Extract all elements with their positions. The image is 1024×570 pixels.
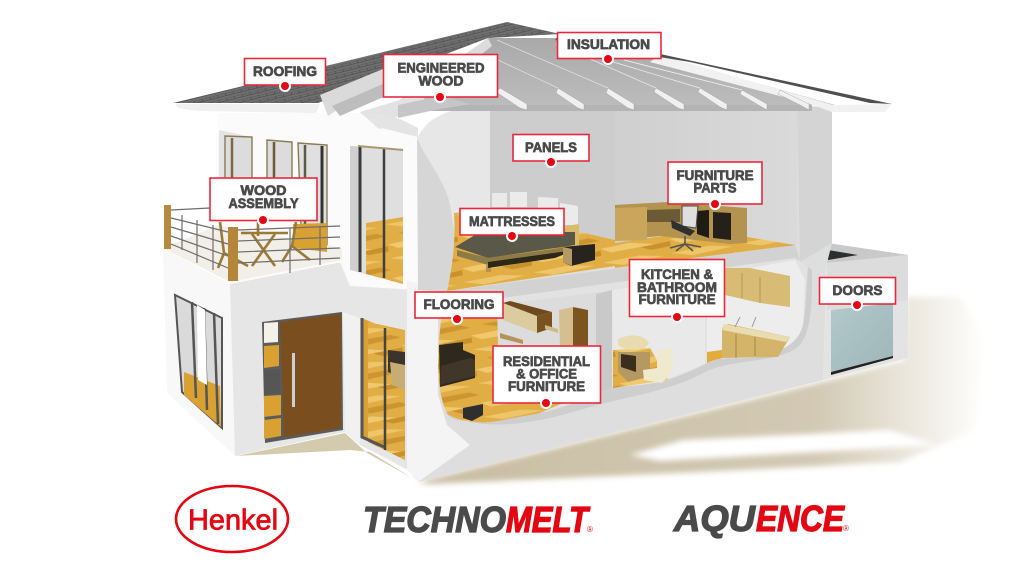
label: furniture parts <box>668 162 762 210</box>
label: residential and office furniture: RESIDENTIAL <box>503 354 590 369</box>
label: furniture parts: FURNITURE <box>676 168 754 183</box>
rafters <box>496 40 809 110</box>
label: kitchen and bathroom furniture: FURNITURE <box>638 292 716 307</box>
house <box>163 22 908 482</box>
left eave rafters <box>320 58 470 137</box>
label: kitchen and bathroom furniture: BATHROOM <box>637 280 717 295</box>
lower left wing wall <box>163 248 235 456</box>
icon: entrance door <box>262 312 343 443</box>
office furniture <box>615 202 747 251</box>
label: wood assembly <box>210 178 317 226</box>
balcony <box>163 205 342 282</box>
logo: Technomelt <box>363 499 593 540</box>
wood table and chairs <box>218 222 310 268</box>
label: insulation: INSULATION <box>567 37 650 52</box>
ground left windows <box>175 295 222 428</box>
label: panels: PANELS <box>525 140 577 155</box>
label: furniture parts: PARTS <box>694 180 736 196</box>
label: kitchen and bathroom furniture: KITCHEN & <box>641 267 713 282</box>
label: wood assembly: ASSEMBLY <box>228 196 298 211</box>
label: flooring <box>415 292 503 325</box>
logo: Henkel: Henkel <box>188 504 278 536</box>
logo: Aquence <box>673 498 849 539</box>
logo: Technomelt: TECHNO <box>363 499 506 540</box>
upper floor room walls <box>417 105 832 292</box>
label: mattresses <box>460 208 564 242</box>
bed <box>455 224 579 272</box>
office chair <box>670 206 701 251</box>
label: engineered wood: WOOD <box>418 74 464 88</box>
bedroom floor <box>447 212 615 291</box>
label: doors <box>820 278 896 311</box>
roof ceiling insulation <box>388 38 892 112</box>
icon: garage door <box>831 303 893 375</box>
label: mattresses: MATTRESSES <box>469 214 555 229</box>
roof tiles <box>173 22 892 113</box>
logo: Aquence: AQU <box>673 498 756 539</box>
label: roofing <box>244 58 326 92</box>
logo: Aquence: ENCE <box>756 498 845 539</box>
label: residential and office furniture: FURNITURE <box>508 379 585 394</box>
bedroom furniture <box>455 192 595 272</box>
kitchen furniture <box>722 268 790 358</box>
upper facade <box>218 113 418 290</box>
label: engineered wood <box>384 54 498 103</box>
label: roofing: ROOFING <box>253 64 317 79</box>
label: kitchen and bathroom furniture <box>630 260 724 323</box>
floor slab <box>445 245 800 308</box>
sofa <box>439 342 483 421</box>
ground floor cutaway <box>438 258 812 425</box>
logo: Henkel <box>176 486 288 552</box>
upper windows <box>219 130 403 284</box>
main cut wall front <box>418 105 832 482</box>
nightstand <box>563 244 595 266</box>
logo: Technomelt: MELT <box>506 499 591 540</box>
ground front glass door <box>362 318 405 460</box>
bathroom furniture <box>618 336 673 383</box>
label: doors: DOORS <box>832 283 882 298</box>
label: engineered wood: ENGINEERED <box>398 60 485 76</box>
label: insulation <box>558 32 661 65</box>
label: residential and office furniture: & OFFICE <box>516 366 577 382</box>
logo: Technomelt: ® <box>587 525 593 534</box>
ground shadow <box>237 297 985 484</box>
label: residential and office furniture <box>493 346 600 409</box>
label: flooring: FLOORING <box>424 297 494 312</box>
lower front wall <box>230 262 420 482</box>
label: wood assembly: WOOD <box>240 183 287 198</box>
logo: Aquence: ® <box>843 524 849 533</box>
living room furniture <box>439 301 588 421</box>
office floor <box>615 230 795 268</box>
garage block <box>823 243 908 380</box>
label: panels <box>513 134 589 168</box>
